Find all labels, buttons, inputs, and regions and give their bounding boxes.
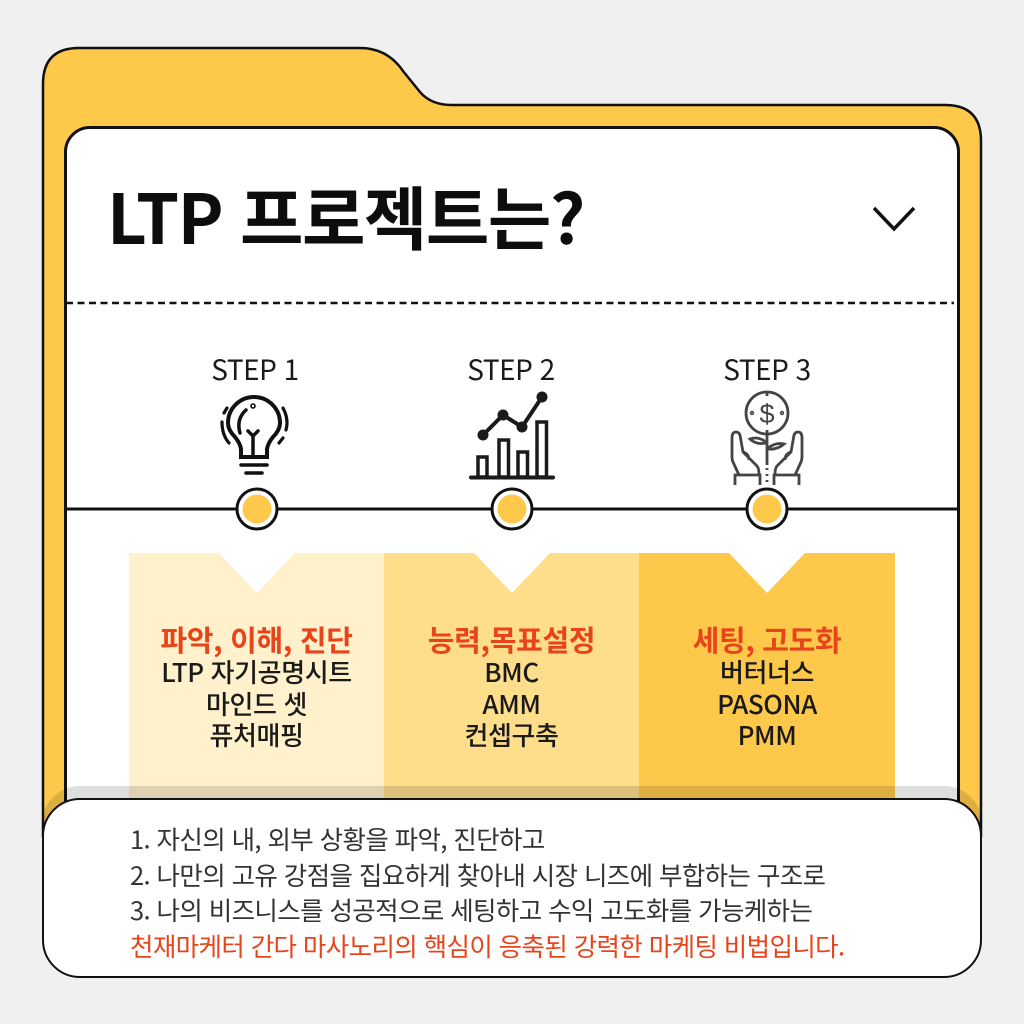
step 3 items: 버터너스 — [720, 653, 814, 690]
step 2 items: BMC — [484, 653, 539, 690]
icon: bar chart with trend line — [469, 392, 555, 480]
marker 1 — [237, 489, 277, 529]
panel: step 1 — [129, 553, 384, 798]
step label 2: STEP 2 — [467, 349, 555, 389]
summary text: 3. 나의 비즈니스를 성공적으로 세팅하고 수익 고도화를 가능케하는 — [130, 891, 812, 928]
step 2 items: 컨셉구축 — [464, 716, 559, 753]
step label 1: STEP 1 — [211, 349, 299, 389]
dashed divider — [67, 302, 954, 304]
summary text — [130, 820, 844, 964]
summary text: 1. 자신의 내, 외부 상황을 파악, 진단하고 — [130, 820, 545, 856]
marker 2 — [492, 489, 532, 529]
step 3 items — [717, 653, 818, 753]
step 3 items: PMM — [738, 716, 796, 753]
panel: step 3 — [639, 553, 895, 798]
step 2 heading: 능력,목표설정 — [428, 618, 595, 660]
icon: chevron — [872, 206, 916, 232]
step 3 items: PASONA — [717, 684, 817, 722]
step label 3: STEP 3 — [723, 349, 811, 389]
step 2 items: AMM — [482, 684, 541, 722]
summary text: 천재마케터 간다 마사노리의 핵심이 응축된 강력한 마케팅 비법입니다. — [130, 927, 844, 964]
step 1 items: 퓨처매핑 — [209, 716, 304, 753]
icon: hands with money plant — [730, 390, 804, 485]
step 1 items: 마인드 셋 — [206, 684, 307, 722]
step 1 heading: 파악, 이해, 진단 — [160, 618, 353, 660]
bottom panel shadow — [42, 786, 982, 836]
panel: summary — [42, 798, 982, 978]
white content card — [64, 126, 960, 852]
step 1 items — [161, 653, 352, 753]
summary text: 2. 나만의 고유 강점을 집요하게 찾아내 시장 니즈에 부합하는 구조로 — [130, 856, 825, 892]
step 3 heading: 세팅, 고도화 — [693, 618, 841, 660]
step 1 items: LTP 자기공명시트 — [161, 653, 352, 690]
marker 3 — [747, 489, 787, 529]
icon: hands with money plant: $ — [759, 399, 775, 429]
title: LTP 프로젝트는? — [107, 164, 584, 264]
timeline — [67, 488, 957, 530]
step 2 items — [464, 653, 559, 753]
icon: light bulb — [220, 395, 289, 475]
panel: step 2 — [384, 553, 639, 798]
